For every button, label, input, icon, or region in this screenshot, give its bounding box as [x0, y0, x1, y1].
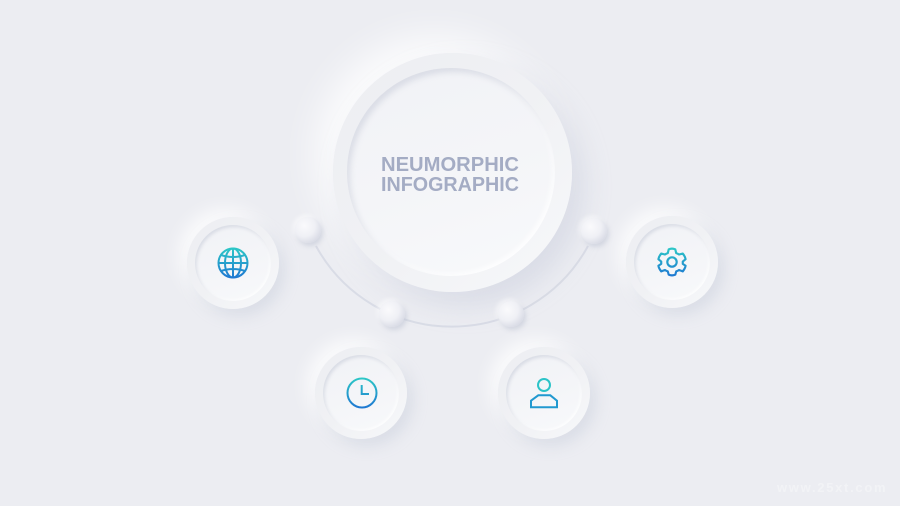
- clock button well: [323, 355, 399, 431]
- person button well: [506, 355, 582, 431]
- connector ball: bottom left: [379, 301, 405, 327]
- connector ball: right: [581, 218, 607, 244]
- icon: gear: [657, 248, 687, 276]
- panel: clock button: [315, 347, 407, 439]
- title: INFOGRAPHIC: [381, 174, 519, 196]
- panel: main circle: [333, 53, 572, 292]
- connector ball: bottom right: [498, 301, 524, 327]
- connector ball: left: [295, 217, 321, 243]
- icon: globe: [218, 248, 248, 278]
- panel: globe button: [187, 217, 279, 309]
- icon: person: [530, 378, 558, 408]
- main circle inner well: [347, 68, 555, 276]
- globe button well: [195, 225, 271, 301]
- title: [381, 154, 519, 196]
- panel: person button: [498, 347, 590, 439]
- icon: clock: [346, 378, 378, 408]
- panel: gear button: [626, 216, 718, 308]
- gear button well: [634, 224, 710, 300]
- watermark: www.25xt.com: [777, 480, 887, 495]
- title: NEUMORPHIC: [381, 154, 519, 176]
